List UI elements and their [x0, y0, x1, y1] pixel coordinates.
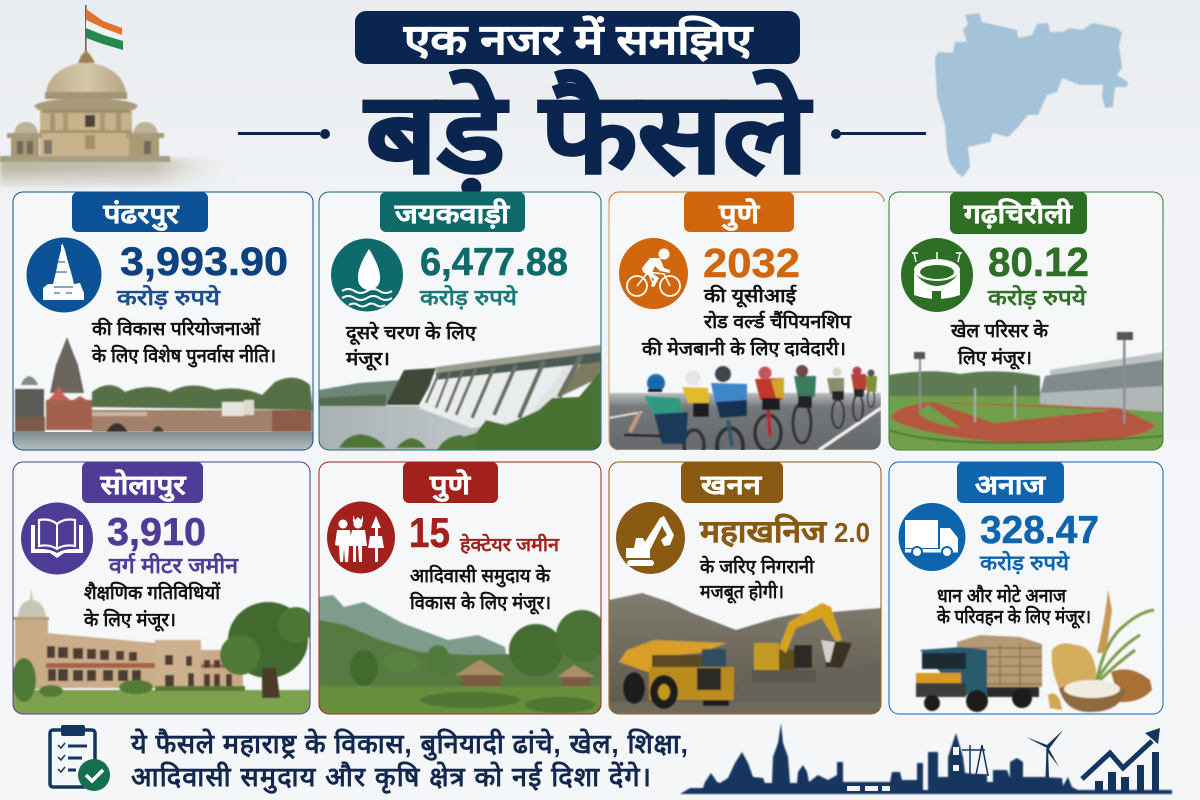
tag: सोलापुर	[82, 462, 203, 503]
photo: temple riverfront	[13, 337, 313, 450]
description	[345, 321, 478, 371]
photo: cyclists	[610, 364, 881, 450]
photo: sports complex	[889, 332, 1163, 450]
figure: महाखनिज 2.0: 2.0	[834, 517, 870, 548]
icon: water drop	[331, 238, 403, 312]
dump truck	[619, 640, 734, 709]
description: शैक्षणिक गतिविधियों	[84, 581, 221, 604]
title right connector	[831, 129, 926, 139]
tag: गढ़चिरौली	[950, 192, 1087, 234]
tag: पंढरपुर	[72, 192, 208, 232]
description: के जरिए निगरानी	[699, 555, 815, 578]
unit: वर्ग मीटर जमीन: वर्ग मीटर जमीन	[108, 552, 239, 578]
tag: पंढरपुर: पंढरपुर	[102, 199, 180, 231]
figure: 2032: 2032	[703, 240, 800, 286]
photo: grain truck	[916, 590, 1154, 712]
panel: गढ़चिरौली	[889, 192, 1163, 450]
description: के परिवहन के लिए मंजूर।	[936, 605, 1091, 629]
description	[641, 284, 852, 360]
panel: जयकवाड़ी	[319, 192, 601, 450]
tag: अनाज: अनाज	[975, 470, 1046, 500]
icon: growth arrow	[1082, 728, 1160, 779]
photo: dam	[319, 345, 601, 450]
panel: पुणे tribal land	[319, 462, 608, 714]
figure: 80.12: 80.12	[988, 239, 1089, 285]
photo: college building	[12, 588, 314, 714]
description: की विकास परियोजनाओं	[91, 317, 262, 340]
tag: जयकवाड़ी	[380, 192, 525, 232]
figure: 15: 15	[409, 509, 450, 556]
unit: करोड़ रुपये: करोड़ रुपये	[979, 550, 1070, 575]
icon: stadium	[901, 238, 973, 312]
panel: पुणे cycling	[609, 192, 884, 464]
figure: 328.47: 328.47	[980, 509, 1099, 552]
description: मंजूर।	[345, 348, 390, 371]
tag: जयकवाड़ी: जयकवाड़ी	[394, 198, 510, 229]
figure: महाखनिज 2.0: महाखनिज	[699, 513, 827, 549]
description: विकास के लिए मंजूर।	[409, 591, 551, 615]
title left connector	[238, 129, 330, 139]
figure: महाखनिज 2.0	[699, 513, 870, 549]
description	[83, 581, 221, 632]
unit: करोड़ रुपये: करोड़ रुपये	[419, 284, 518, 310]
photo: hills and huts	[319, 595, 608, 714]
tag: खनन	[681, 462, 783, 503]
tag: पुणे: पुणे	[718, 198, 761, 231]
description: की यूसीआई	[703, 284, 797, 308]
icon: wind turbine	[1026, 730, 1063, 778]
description	[409, 564, 551, 615]
closing message: आदिवासी समुदाय और कृषि क्षेत्र को नई दिशा देंगे।	[131, 761, 651, 794]
excavator	[752, 603, 852, 682]
icon: temple	[26, 238, 102, 312]
tag: खनन: खनन	[700, 470, 762, 500]
main title: बड़े फैसले: बड़े फैसले	[363, 69, 813, 196]
unit: करोड़ रुपये: करोड़ रुपये	[987, 284, 1087, 310]
panel: अनाज	[889, 462, 1163, 714]
icon: open book	[21, 502, 93, 574]
icon: tribal family	[327, 502, 395, 574]
description: की मेजबानी के लिए दावेदारी।	[641, 337, 846, 360]
description: आदिवासी समुदाय के	[410, 564, 551, 588]
photo: mining site	[609, 593, 881, 714]
icon: cyclist	[619, 238, 688, 309]
description	[950, 319, 1049, 370]
description: दूसरे चरण के लिए	[345, 321, 478, 346]
tag: सोलापुर: सोलापुर	[99, 469, 187, 502]
description: मजबूत होगी।	[699, 580, 784, 604]
figure: 3,910: 3,910	[107, 511, 206, 554]
tag: गढ़चिरौली: गढ़चिरौली	[963, 198, 1073, 229]
icon: indian flag	[85, 5, 123, 51]
tag: अनाज	[957, 462, 1064, 503]
header pill: एक नजर में समझिए: एक नजर में समझिए	[403, 15, 754, 63]
unit: हेक्टेयर जमीन: हेक्टेयर जमीन	[459, 533, 560, 556]
icon: excavator	[616, 502, 685, 574]
panel: पंढरपुर	[13, 192, 313, 450]
tag: पुणे	[403, 462, 498, 503]
figure: 3,993.90: 3,993.90	[120, 240, 288, 284]
closing message	[130, 728, 688, 794]
description: लिए मंजूर।	[957, 346, 1032, 370]
description	[91, 317, 276, 368]
riders	[865, 370, 877, 407]
description: के लिए मंजूर।	[83, 608, 176, 632]
description: धान और मोटे अनाज	[937, 584, 1067, 607]
description	[936, 584, 1091, 629]
skyline with wind turbine	[680, 723, 1172, 794]
icon: truck	[898, 503, 966, 571]
description: के लिए विशेष पुनर्वास नीति।	[91, 344, 276, 368]
figure: 6,477.88: 6,477.88	[420, 241, 568, 284]
panel: सोलापुर	[12, 462, 314, 714]
map of maharashtra	[935, 13, 1128, 177]
panel: खनन	[609, 462, 881, 714]
parliament building illustration	[0, 5, 238, 192]
description	[699, 555, 815, 604]
description: रोड वर्ल्ड चैंपियनशिप	[703, 310, 852, 333]
unit: करोड़ रुपये: करोड़ रुपये	[116, 284, 221, 310]
header pill: एक नजर में समझिए	[355, 11, 800, 64]
closing message: ये फैसले महाराष्ट्र के विकास, बुनियादी ढांचे, खेल, शिक्षा,	[130, 728, 688, 761]
tag: पुणे: पुणे	[429, 469, 472, 502]
tag: पुणे	[684, 192, 794, 232]
icon: checklist	[50, 725, 110, 791]
description: खेल परिसर के	[950, 319, 1049, 342]
